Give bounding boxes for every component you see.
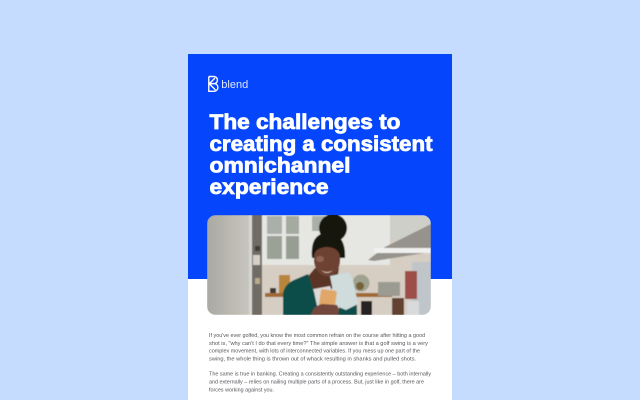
title: creating a consistent (210, 133, 433, 156)
title: experience (210, 176, 328, 199)
paragraph one: shot is, "why can't I do that every time?" The simple answer is that a golf swing is a very (209, 341, 428, 347)
title: omnichannel (210, 154, 350, 178)
body text (209, 333, 431, 394)
towel (330, 272, 358, 310)
black appliance (361, 301, 372, 315)
paragraph one: complex movement, with lots of interconnected variables. If you mess up one part of the (209, 348, 420, 354)
paragraph one: swing, the whole thing is thrown out of whack resulting in shanks and pulled shots. (209, 356, 416, 362)
plate (352, 274, 370, 292)
white top (312, 285, 332, 306)
blue header panel (188, 54, 452, 279)
paragraph two (209, 372, 431, 394)
phone (319, 289, 337, 308)
logo wordmark: blend (221, 79, 248, 91)
hair (312, 233, 345, 258)
title: The challenges to (210, 111, 400, 134)
jar (279, 275, 290, 293)
range hood (368, 224, 431, 261)
paragraph two: forces working against you. (209, 388, 274, 394)
dark gap with magnets (252, 215, 262, 315)
shelf (265, 293, 285, 297)
hand (311, 304, 339, 315)
face (314, 247, 340, 276)
hair bun (319, 214, 347, 242)
fridge side right (412, 262, 431, 315)
utensils (405, 271, 417, 299)
fridge (207, 215, 252, 315)
paragraph one (209, 333, 428, 362)
paragraph two: and externally – relies on nailing multiple parts of a process. But, just like in golf, there are (209, 380, 424, 386)
photo: woman using phone in kitchen (207, 214, 431, 315)
document page (188, 54, 452, 400)
neck and shoulders skin (308, 268, 340, 290)
logo: blend (209, 76, 248, 91)
paragraph one: If you've ever golfed, you know the most common refrain on the course after hitting a good (209, 333, 425, 339)
cardigan (283, 274, 357, 315)
paragraph two: The same is true in banking. Creating a consistently outstanding experience – both internally (209, 372, 431, 378)
bottle (407, 301, 419, 315)
title (210, 111, 433, 199)
cabinets (262, 215, 390, 265)
kitchen wall (261, 238, 431, 315)
icon: blend mark (209, 76, 218, 91)
